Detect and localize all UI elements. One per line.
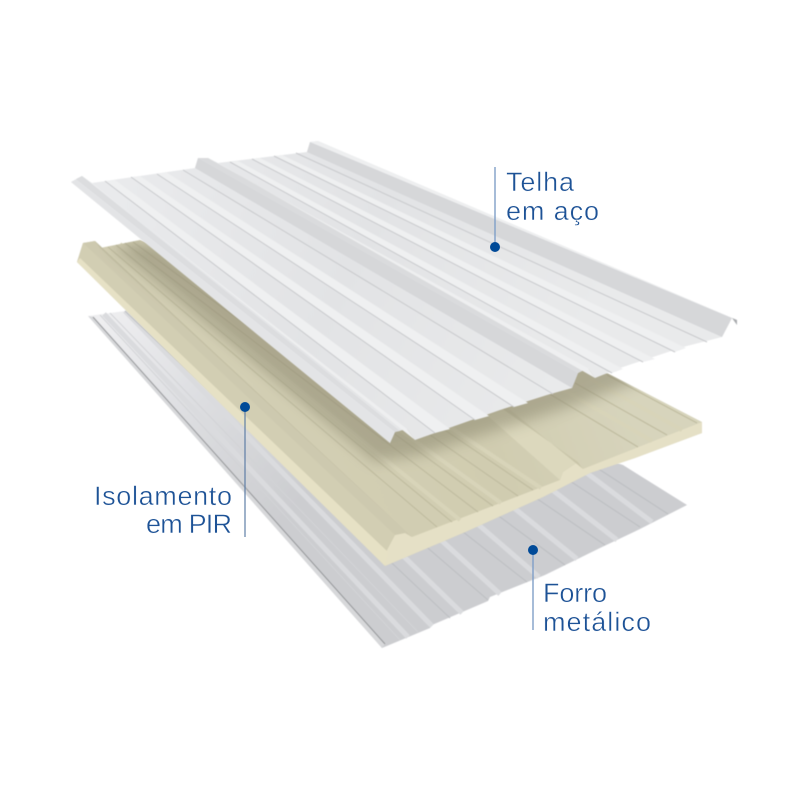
front cut face of insulation	[385, 422, 702, 566]
layer: metal liner sheet	[88, 308, 687, 648]
label: Isolamento em PIR	[94, 402, 250, 539]
label: Forro metálico: Forro	[543, 578, 607, 608]
label: Isolamento em PIR: em PIR	[146, 509, 232, 539]
layer: PIR insulation core	[77, 230, 702, 566]
illustration: layered roof panel with labels	[71, 141, 738, 648]
label: Isolamento em PIR: Isolamento	[94, 481, 232, 511]
left ridge	[71, 176, 395, 443]
shadow cast by top sheet	[112, 240, 636, 466]
left ridge of insulation	[83, 241, 412, 537]
right ridge	[307, 142, 732, 337]
ribs and light bands of the pans	[105, 155, 686, 433]
label: Forro metálico	[528, 545, 651, 637]
label: Telha em aço: Telha	[506, 167, 575, 197]
layer: steel roof tile	[71, 141, 737, 443]
label: Telha em aço: em aço	[506, 196, 599, 226]
label: Forro metálico: metálico	[543, 607, 651, 637]
label: Telha em aço	[490, 167, 599, 252]
middle ridge of insulation	[470, 400, 578, 480]
middle ridge	[195, 158, 578, 388]
